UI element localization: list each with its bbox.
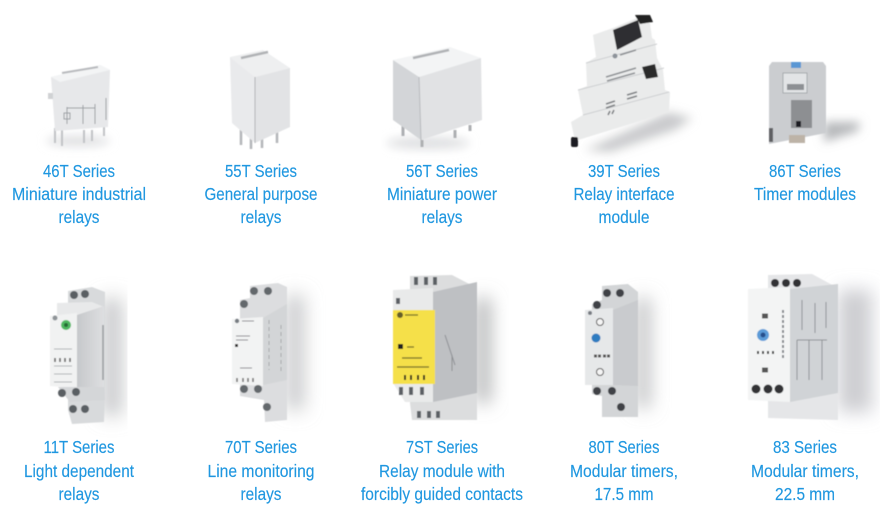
icon: 39T relay interface module — [571, 15, 692, 152]
label: 83 Series: 22.5 mm — [775, 484, 835, 504]
label: 83 Series: 83 Series — [773, 437, 837, 457]
label: 39T Series — [574, 161, 674, 227]
label: 39T Series: Relay interface — [574, 184, 674, 204]
label: 39T Series: module — [598, 207, 650, 227]
label: 80T Series: 80T Series — [588, 437, 660, 457]
label: 80T Series: Modular timers, — [570, 461, 678, 481]
icon: 80T modular timer — [585, 284, 650, 417]
label: 70T Series: 70T Series — [225, 437, 297, 457]
label: 55T Series — [204, 161, 318, 227]
icon: 11T light dependent relay — [50, 287, 122, 424]
product card: 55T Series — [204, 50, 318, 227]
label: 70T Series — [208, 437, 314, 504]
label: 7ST Series: 7ST Series — [406, 437, 478, 457]
label: 55T Series: General purpose — [204, 184, 318, 204]
label: 55T Series: relays — [240, 207, 282, 227]
product card: 11T Series — [24, 287, 134, 504]
label: 56T Series: 56T Series — [406, 161, 478, 181]
product card: 70T Series — [208, 283, 314, 504]
icon: 83 modular timer — [748, 274, 872, 420]
label: 39T Series: 39T Series — [588, 161, 660, 181]
product card: 46T Series — [12, 65, 146, 227]
icon: 46T miniature relay — [46, 65, 110, 146]
product card: 80T Series — [570, 284, 678, 504]
label: 46T Series: relays — [58, 207, 100, 227]
label: 86T Series: 86T Series — [769, 161, 841, 181]
product card: 7ST Series — [361, 275, 523, 504]
label: 11T Series: relays — [58, 484, 100, 504]
icon: 7ST relay module — [393, 275, 490, 420]
label: 46T Series: 46T Series — [43, 161, 115, 181]
label: 86T Series — [754, 161, 856, 204]
label: 86T Series: Timer modules — [754, 184, 856, 204]
label: 55T Series: 55T Series — [225, 161, 297, 181]
product card: 39T Series — [571, 15, 692, 227]
label: 11T Series: 11T Series — [44, 437, 115, 457]
label: 11T Series: Light dependent — [24, 461, 134, 481]
icon: 70T line monitoring relay — [232, 283, 304, 422]
label: 83 Series: Modular timers, — [751, 461, 859, 481]
label: 46T Series — [12, 161, 146, 227]
label: 11T Series — [24, 437, 134, 504]
label: 56T Series — [387, 161, 497, 227]
icon: 55T general purpose relay — [230, 50, 290, 149]
label: 46T Series: Miniature industrial — [12, 184, 146, 204]
label: 70T Series: Line monitoring — [208, 461, 314, 481]
icon: 86T timer module — [769, 62, 860, 144]
label: 56T Series: relays — [422, 207, 463, 227]
label: 7ST Series: Relay module with — [379, 461, 505, 481]
product card: 86T Series — [754, 62, 860, 204]
product card: 56T Series — [386, 47, 497, 227]
label: 56T Series: Miniature power — [387, 184, 497, 204]
product card: 83 Series — [748, 274, 872, 504]
label: 7ST Series: forcibly guided contacts — [361, 484, 523, 504]
label: 80T Series: 17.5 mm — [594, 484, 654, 504]
icon: 56T miniature power relay — [386, 47, 482, 149]
label: 80T Series — [570, 437, 678, 504]
label: 7ST Series — [361, 437, 523, 504]
label: 83 Series — [751, 437, 859, 504]
label: 70T Series: relays — [240, 484, 282, 504]
